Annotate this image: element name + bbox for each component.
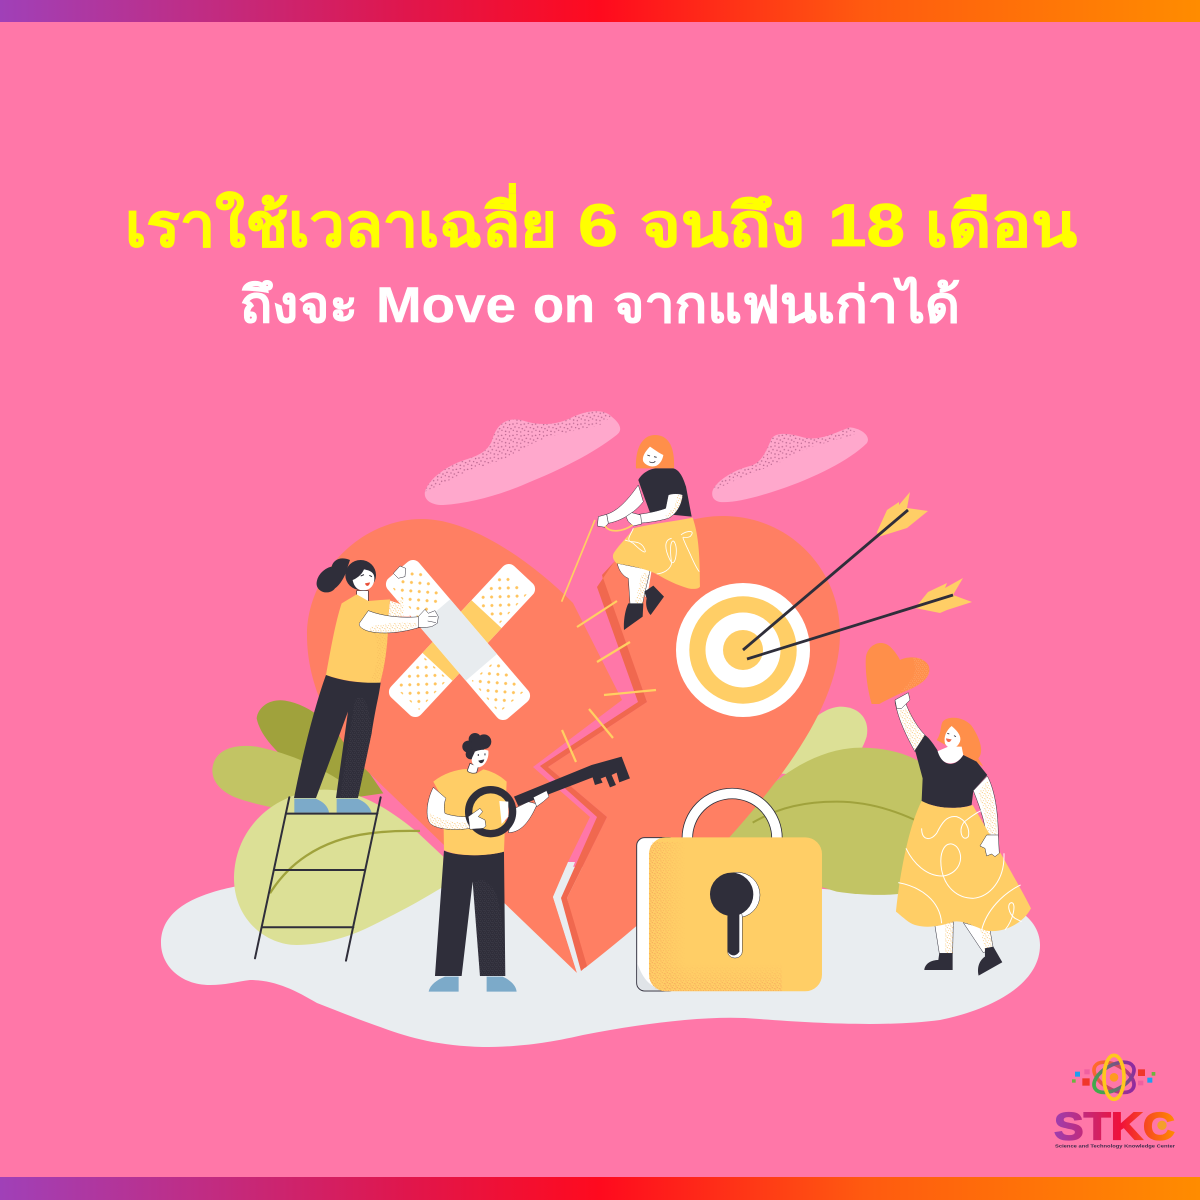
woman sitting on heart — [597, 435, 700, 630]
shirt — [638, 468, 692, 517]
leaf vein — [270, 831, 420, 893]
woman on ladder — [294, 558, 438, 798]
right arm — [628, 494, 683, 523]
hands — [597, 513, 642, 527]
raised arm and heart — [866, 643, 929, 752]
arm — [895, 702, 925, 752]
arrow lower — [747, 578, 972, 659]
face — [945, 726, 960, 748]
right arm — [508, 802, 537, 833]
orange heart — [866, 643, 929, 704]
target — [676, 583, 810, 717]
bandage cross — [383, 557, 538, 723]
logo atom — [1089, 1055, 1139, 1099]
boots — [924, 947, 1002, 976]
hand on key — [533, 791, 549, 807]
top — [915, 735, 987, 808]
headline line 2: จากแฟนเก่าได้ — [613, 276, 960, 333]
pants — [294, 675, 381, 798]
cloud right — [712, 427, 868, 502]
hair — [345, 560, 376, 590]
left arm — [427, 787, 470, 830]
skirt curls — [898, 811, 1022, 930]
right arm — [973, 776, 998, 838]
broken heart — [307, 516, 840, 973]
shirt — [433, 769, 507, 855]
leaves right — [727, 707, 930, 895]
hand on hip — [980, 835, 999, 857]
hand on bandage — [418, 609, 438, 627]
bandage strip front — [383, 557, 533, 723]
headline line 1 — [125, 183, 1077, 259]
front arm — [359, 611, 422, 633]
logo subtitle: Science and Technology Knowledge Center — [1055, 1144, 1175, 1149]
left arm — [607, 485, 643, 523]
logo wordmark: STKC — [1054, 1104, 1175, 1148]
heart right half — [548, 516, 840, 968]
hair — [937, 718, 983, 767]
headline line 2: on — [533, 277, 595, 333]
boots — [624, 586, 664, 630]
ladder — [255, 797, 381, 961]
headline line 2: ถึงจะ — [240, 277, 358, 333]
arrow upper — [743, 492, 928, 650]
hand — [895, 693, 910, 708]
top hand — [393, 566, 406, 578]
shirt — [326, 594, 390, 683]
headline line 1: เราใช้เวลาเฉลี่ย — [125, 183, 557, 259]
skirt curls — [625, 528, 699, 574]
headline line 2 — [240, 276, 960, 333]
bandage strip back — [386, 561, 538, 720]
headline line 1: 18 — [828, 192, 905, 259]
olive leaf — [257, 700, 383, 800]
woman with heart — [866, 643, 1031, 976]
crack spark lines — [562, 601, 656, 762]
shoes — [294, 799, 372, 813]
neck — [357, 591, 368, 602]
hair — [462, 733, 491, 759]
mid green leaf — [212, 746, 357, 813]
crack shadow band — [540, 562, 647, 971]
headline line 2: Move — [376, 277, 516, 333]
light green leaf — [777, 707, 867, 777]
light green leaf — [234, 790, 443, 945]
lock body — [649, 837, 822, 991]
face — [472, 750, 488, 767]
back arm — [388, 601, 410, 617]
heart left half — [307, 519, 622, 973]
shoes — [429, 977, 517, 992]
keyhole — [710, 872, 760, 958]
shackle — [687, 793, 777, 838]
leaves left — [212, 700, 443, 945]
headline line 1: 6 — [578, 192, 618, 259]
ponytail — [317, 558, 350, 592]
mid green leaf — [727, 748, 930, 895]
skirt — [613, 518, 700, 589]
hand on ring — [468, 808, 486, 829]
pants — [435, 851, 505, 976]
headline line 1: เดือน — [925, 192, 1077, 259]
leaf vein — [753, 802, 915, 823]
headline line 1: จนถึง — [640, 192, 805, 259]
neck — [467, 763, 478, 773]
padlock — [637, 793, 822, 991]
title — [125, 183, 1077, 333]
near leg — [617, 563, 650, 604]
gray crack strip — [553, 862, 581, 973]
far leg — [640, 563, 653, 597]
logo STKC — [1054, 1055, 1175, 1149]
key — [469, 757, 630, 834]
chest and neck — [937, 747, 963, 763]
ground blob — [161, 866, 1040, 1047]
top gradient bar — [0, 0, 1200, 22]
lock back plate — [637, 838, 677, 991]
face — [353, 569, 374, 590]
man with key — [427, 733, 630, 992]
cloud left — [425, 411, 620, 505]
face — [643, 447, 663, 466]
logo pixels — [1072, 1069, 1155, 1086]
hair — [636, 435, 674, 468]
bottom gradient bar — [0, 1177, 1200, 1200]
legs — [935, 922, 993, 953]
logo dot — [1157, 1121, 1167, 1130]
rope — [562, 520, 633, 602]
shoes and ladder — [255, 797, 381, 961]
skirt — [896, 801, 1031, 931]
